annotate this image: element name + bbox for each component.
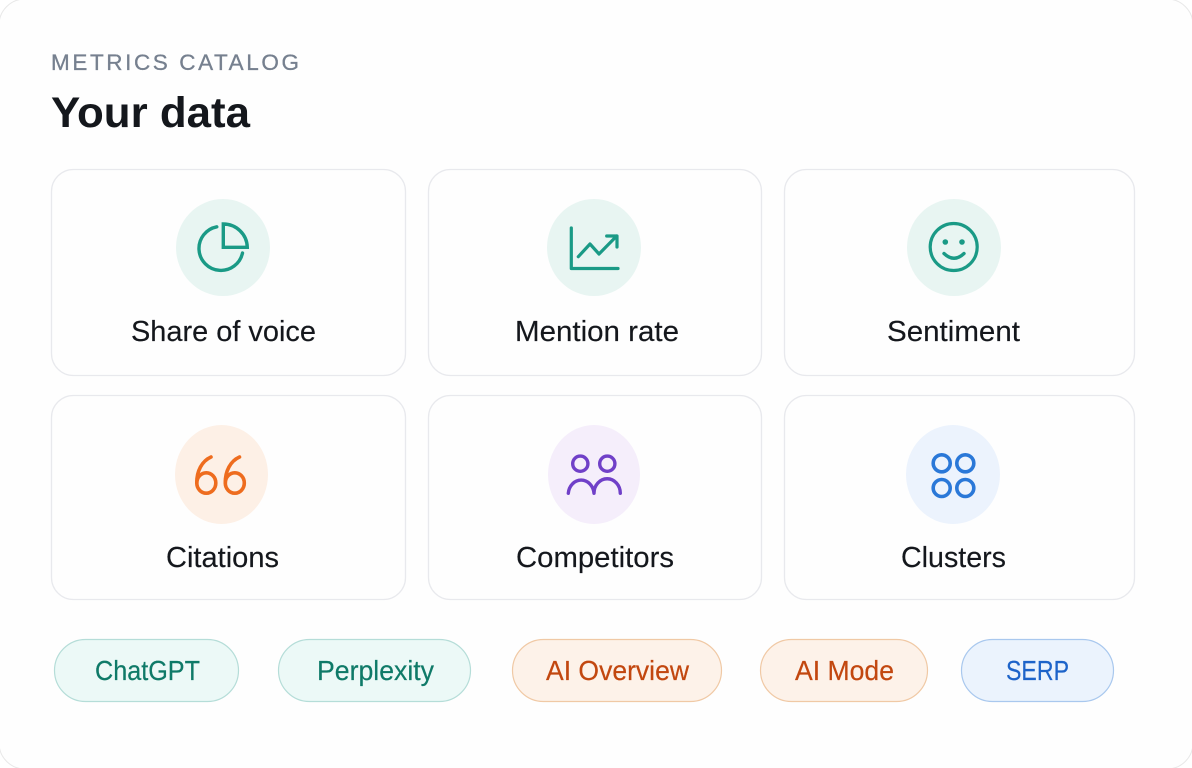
pill: AI Mode: AI Mode xyxy=(795,655,894,686)
icon: two people xyxy=(548,425,640,524)
pill: AI Mode xyxy=(760,640,928,702)
icon: four circles xyxy=(906,425,1000,524)
pill: SERP xyxy=(962,640,1114,702)
pill: AI Overview xyxy=(512,640,722,702)
eyebrow text: METRICS CATALOG xyxy=(51,50,299,75)
label: Share of voice xyxy=(131,316,316,348)
panel: competitors xyxy=(428,396,762,600)
panel: clusters xyxy=(784,396,1134,600)
panel: citations xyxy=(52,396,406,600)
panel: share of voice xyxy=(52,170,406,376)
label: Sentiment xyxy=(887,316,1020,348)
pill: Perplexity xyxy=(278,640,470,702)
label: Clusters xyxy=(901,542,1006,574)
pill: SERP: SERP xyxy=(1006,655,1069,686)
title: Your data xyxy=(51,89,251,137)
icon: citation quote marks xyxy=(175,425,268,524)
label: Mention rate xyxy=(515,316,679,348)
panel: sentiment xyxy=(784,170,1134,376)
pill: AI Overview: AI Overview xyxy=(546,655,690,686)
label: Citations xyxy=(166,542,279,574)
icon: smiley xyxy=(907,199,1001,296)
pill: Perplexity: Perplexity xyxy=(317,655,434,686)
header xyxy=(51,50,299,137)
pill: ChatGPT xyxy=(54,640,238,702)
icon: pie chart xyxy=(176,199,270,296)
pill: ChatGPT: ChatGPT xyxy=(95,655,200,686)
icon: line chart xyxy=(547,199,641,296)
panel: mention rate xyxy=(428,170,762,376)
label: Competitors xyxy=(516,542,674,574)
